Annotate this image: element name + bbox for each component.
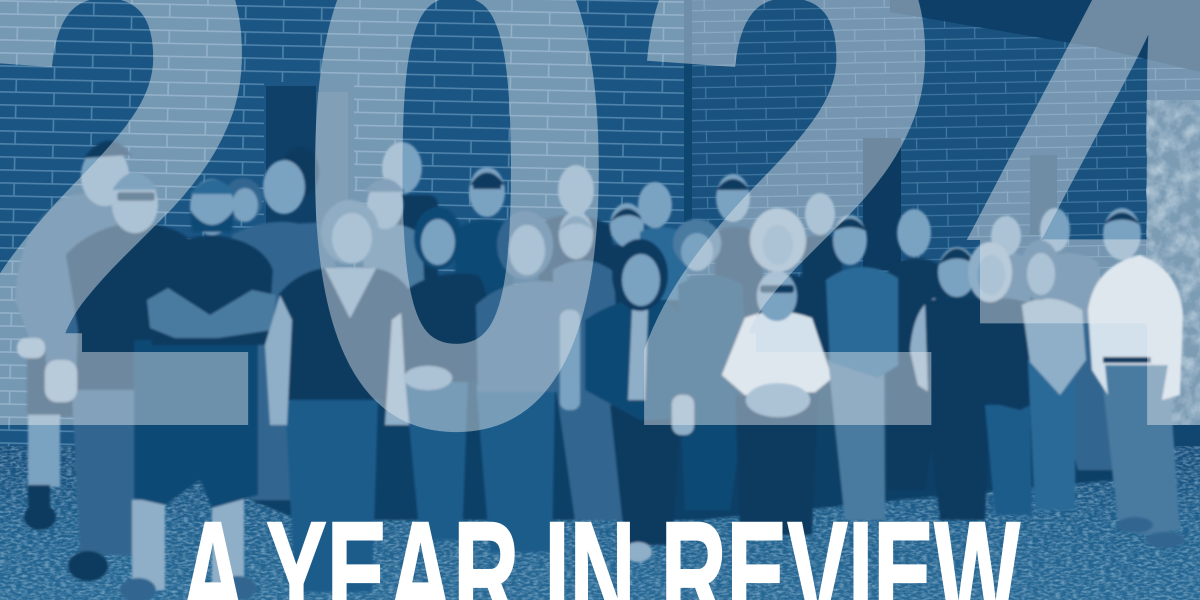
brick wall, left section	[0, 0, 690, 450]
person: man with crossed arms	[120, 179, 276, 600]
person: woman with V-neck	[265, 200, 415, 592]
person: woman glasses back left	[223, 178, 263, 222]
person: front woman in black blazer	[585, 239, 700, 562]
dark hedge	[1100, 425, 1200, 475]
door	[264, 82, 354, 232]
brick wall, right section	[690, 0, 1200, 450]
person: bald glasses man	[985, 216, 1030, 320]
person: front older man in white shirt	[722, 271, 832, 535]
person: tall man blue sweater	[826, 215, 898, 520]
downspout	[684, 0, 692, 222]
person: tall bald man	[382, 142, 438, 285]
person: woman light sweater	[1020, 240, 1086, 510]
person: man black tee	[888, 209, 948, 490]
lawn	[0, 446, 1200, 600]
person: blond woman dark jacket	[968, 242, 1042, 515]
person: bald man dark sweater	[535, 165, 620, 300]
person: grey shirt man	[1040, 208, 1118, 470]
window slit one	[863, 138, 901, 270]
person: man polo	[232, 160, 322, 500]
person: back man dark hair	[270, 147, 340, 300]
person: woman with tan polo	[476, 211, 580, 552]
person: bearded man with glasses	[715, 174, 765, 330]
person: bald man blue tee	[638, 182, 690, 300]
team of people	[15, 141, 1185, 600]
person: left man in sweater	[15, 141, 132, 530]
person: glasses man behind	[802, 193, 842, 300]
person: man with cap	[362, 178, 425, 300]
shadow mass behind team legs	[240, 290, 1115, 520]
person: sunglasses man	[455, 167, 515, 300]
person: woman in tank top	[910, 247, 993, 520]
person: woman with dark blouse	[400, 207, 490, 540]
person: older woman curly hair	[673, 219, 748, 510]
trees on the right	[1146, 100, 1200, 430]
window slit two	[1030, 155, 1057, 235]
roof soffit	[890, 0, 1200, 72]
person: man in white shirt at right	[1088, 208, 1185, 548]
person: woman white hair	[750, 208, 830, 360]
person: woman short hair grey jacket	[553, 211, 625, 520]
person: woman behind	[600, 203, 645, 305]
person: man with cap and glasses	[42, 172, 190, 581]
